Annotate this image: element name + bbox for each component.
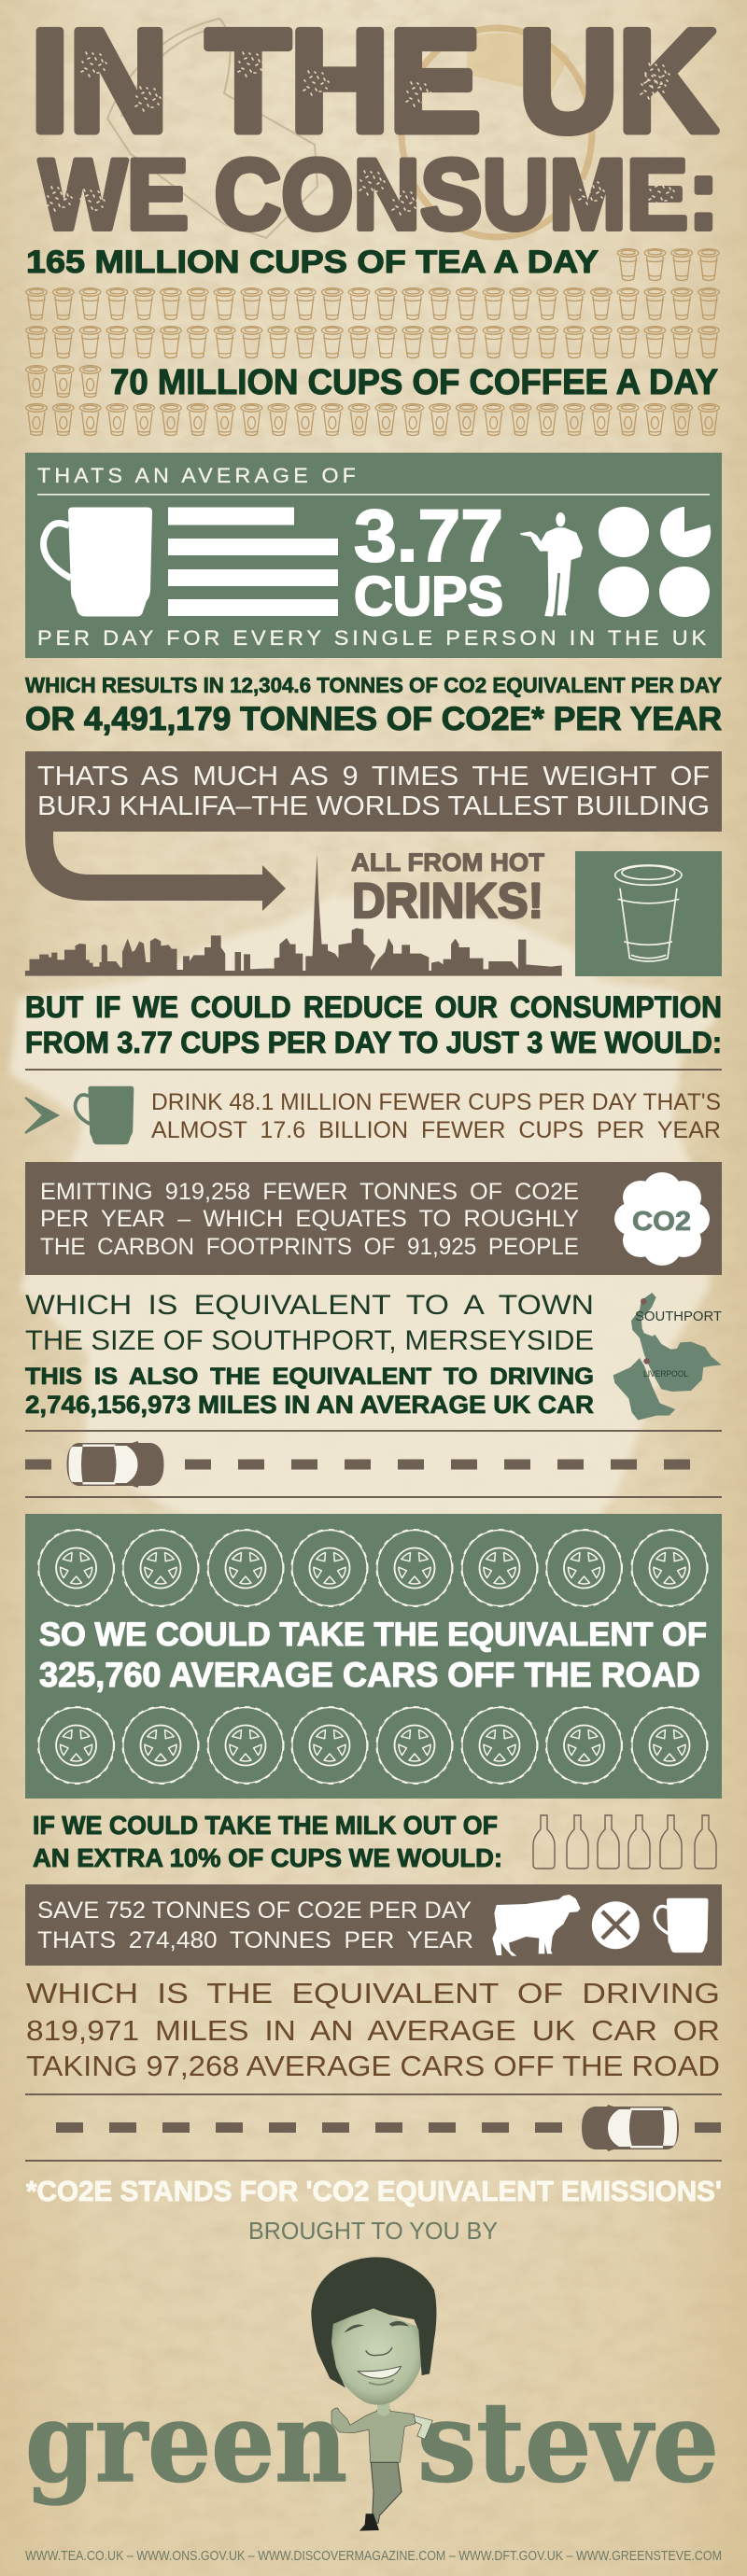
panel: emissions saved: PER YEAR – WHICH EQUATES TO ROUGHLY <box>40 1206 579 1232</box>
road with car 2 <box>56 2105 721 2151</box>
reduction heading: FROM 3.77 CUPS PER DAY TO JUST 3 WE WOULD: <box>25 1026 722 1059</box>
panel: milk saving: THATS 274,480 TONNES PER YEAR <box>37 1927 473 1953</box>
panel: emissions saved: EMITTING 919,258 FEWER TONNES OF CO2E <box>40 1179 579 1205</box>
hair <box>311 2257 436 2387</box>
map of Merseyside: SOUTHPORT <box>635 1309 722 1324</box>
green square with takeaway cup <box>575 851 722 976</box>
milk heading: IF WE COULD TAKE THE MILK OUT OF <box>33 1811 498 1840</box>
icon: milk bottles <box>533 1815 716 1869</box>
icon: car <box>67 1441 164 1488</box>
Dubai skyline <box>25 854 562 976</box>
map of Merseyside: LIVERPOOL <box>643 1369 688 1379</box>
tea cup row 2 <box>26 327 719 358</box>
pencil sketch cup <box>107 19 317 238</box>
cups label: CUPS <box>354 566 503 627</box>
chevron arrow <box>25 1098 58 1133</box>
arrow from panel to skyline <box>25 832 286 911</box>
panel: emissions saved: THE CARBON FOOTPRINTS OF 91,925 PEOPLE <box>40 1234 579 1260</box>
coffee heading: 70 MILLION CUPS OF COFFEE A DAY <box>110 363 718 402</box>
equivalent driving text: TAKING 97,268 AVERAGE CARS OFF THE ROAD <box>26 2050 720 2082</box>
shoe <box>359 2513 379 2531</box>
logo: green steve: green <box>25 2377 347 2507</box>
equivalent driving text: 819,971 MILES IN AN AVERAGE UK CAR OR <box>26 2014 720 2047</box>
tonnes per year: OR 4,491,179 TONNES OF CO2E* PER YEAR <box>25 701 722 737</box>
equivalent driving text: WHICH IS THE EQUIVALENT OF DRIVING <box>26 1977 720 2009</box>
trousers <box>371 2462 402 2523</box>
icon: man silhouette <box>520 512 583 617</box>
neck <box>377 2403 389 2415</box>
all from hot: ALL FROM HOT <box>351 848 545 876</box>
wheels row bottom <box>38 1707 708 1784</box>
tea cup row 1 <box>26 288 719 319</box>
miles driving text: THIS IS ALSO THE EQUIVALENT TO DRIVING <box>25 1364 594 1390</box>
panel: milk saving <box>25 1884 722 1966</box>
cars off road text <box>39 1617 707 1694</box>
eyes <box>344 2321 409 2332</box>
coffee cup row <box>26 404 719 435</box>
coffee ring stain <box>402 28 592 237</box>
fewer cups text: ALMOST 17.6 BILLION FEWER CUPS PER YEAR <box>151 1117 721 1143</box>
equivalent driving text <box>26 1977 720 2082</box>
icon: big mug <box>44 508 152 616</box>
footnote: *CO2E STANDS FOR 'CO2 EQUIVALENT EMISSIONS' <box>26 2175 722 2207</box>
tea cups beside heading <box>617 249 719 280</box>
panel: emissions saved <box>25 1162 722 1275</box>
panel: milk saving: SAVE 752 TONNES OF CO2E PER DAY <box>37 1897 472 1924</box>
reduction heading <box>25 990 722 1059</box>
icon: CO2 cloud <box>614 1172 710 1266</box>
icon: cross <box>592 1901 640 1949</box>
coffee cups beside heading <box>26 366 101 398</box>
panel label top: THATS AN AVERAGE OF <box>37 464 359 487</box>
title: In the UK: IN THE UK <box>31 0 717 161</box>
map of Merseyside <box>613 1293 722 1421</box>
panel: Burj Khalifa comparison <box>25 751 722 832</box>
icon: car 2 <box>582 2105 679 2151</box>
drinks: DRINKS! <box>352 874 543 929</box>
panel: Burj Khalifa comparison: THATS AS MUCH AS 9 TIMES THE WEIGHT OF <box>37 762 710 791</box>
fewer cups text <box>151 1089 721 1143</box>
caricature of Steve <box>311 2257 436 2531</box>
town comparison text <box>25 1290 594 1356</box>
mouth <box>358 2366 401 2378</box>
shirt and arms <box>331 2408 416 2462</box>
cars off road text: SO WE COULD TAKE THE EQUIVALENT OF <box>39 1617 707 1653</box>
road with car <box>25 1441 690 1488</box>
nose <box>366 2347 392 2356</box>
panel label bottom: PER DAY FOR EVERY SINGLE PERSON IN THE UK <box>37 626 710 650</box>
icon: takeaway cup <box>615 865 682 961</box>
logo: green steve: steve <box>417 2377 719 2507</box>
face <box>331 2308 423 2405</box>
panel: Burj Khalifa comparison: BURJ KHALIFA–THE WORLDS TALLEST BUILDING <box>37 791 710 821</box>
wheels row top <box>38 1530 708 1606</box>
miles driving text: 2,746,156,973 MILES IN AN AVERAGE UK CAR <box>25 1391 594 1419</box>
tonnes per day: WHICH RESULTS IN 12,304.6 TONNES OF CO2 EQUIVALENT PER DAY <box>25 673 722 697</box>
title distress specks <box>47 52 674 215</box>
fewer cups text: DRINK 48.1 MILLION FEWER CUPS PER DAY THAT'S <box>151 1089 721 1115</box>
tally bars <box>168 508 338 616</box>
panel: cars off the road <box>25 1514 722 1799</box>
pie circles showing 3.77 <box>599 507 711 617</box>
logo: green steve <box>25 2377 719 2507</box>
brought to you by: BROUGHT TO YOU BY <box>248 2217 498 2245</box>
icon: white mug <box>655 1898 708 1953</box>
miles driving text <box>25 1364 594 1419</box>
town comparison text: THE SIZE OF SOUTHPORT, MERSEYSIDE <box>25 1325 594 1356</box>
icon: cow <box>492 1895 581 1956</box>
town comparison text: WHICH IS EQUIVALENT TO A TOWN <box>25 1290 594 1321</box>
milk heading <box>33 1811 502 1872</box>
cars off road text: 325,760 AVERAGE CARS OFF THE ROAD <box>39 1656 700 1694</box>
tea heading: 165 MILLION CUPS OF TEA A DAY <box>26 245 599 280</box>
icon: green mug <box>76 1086 134 1144</box>
3.77 figure: 3.77 <box>354 494 503 577</box>
reduction heading: BUT IF WE COULD REDUCE OUR CONSUMPTION <box>25 990 722 1024</box>
panel: average cups per person <box>25 453 722 658</box>
icon: CO2 cloud: CO2 <box>632 1207 691 1237</box>
milk heading: AN EXTRA 10% OF CUPS WE WOULD: <box>33 1843 502 1872</box>
